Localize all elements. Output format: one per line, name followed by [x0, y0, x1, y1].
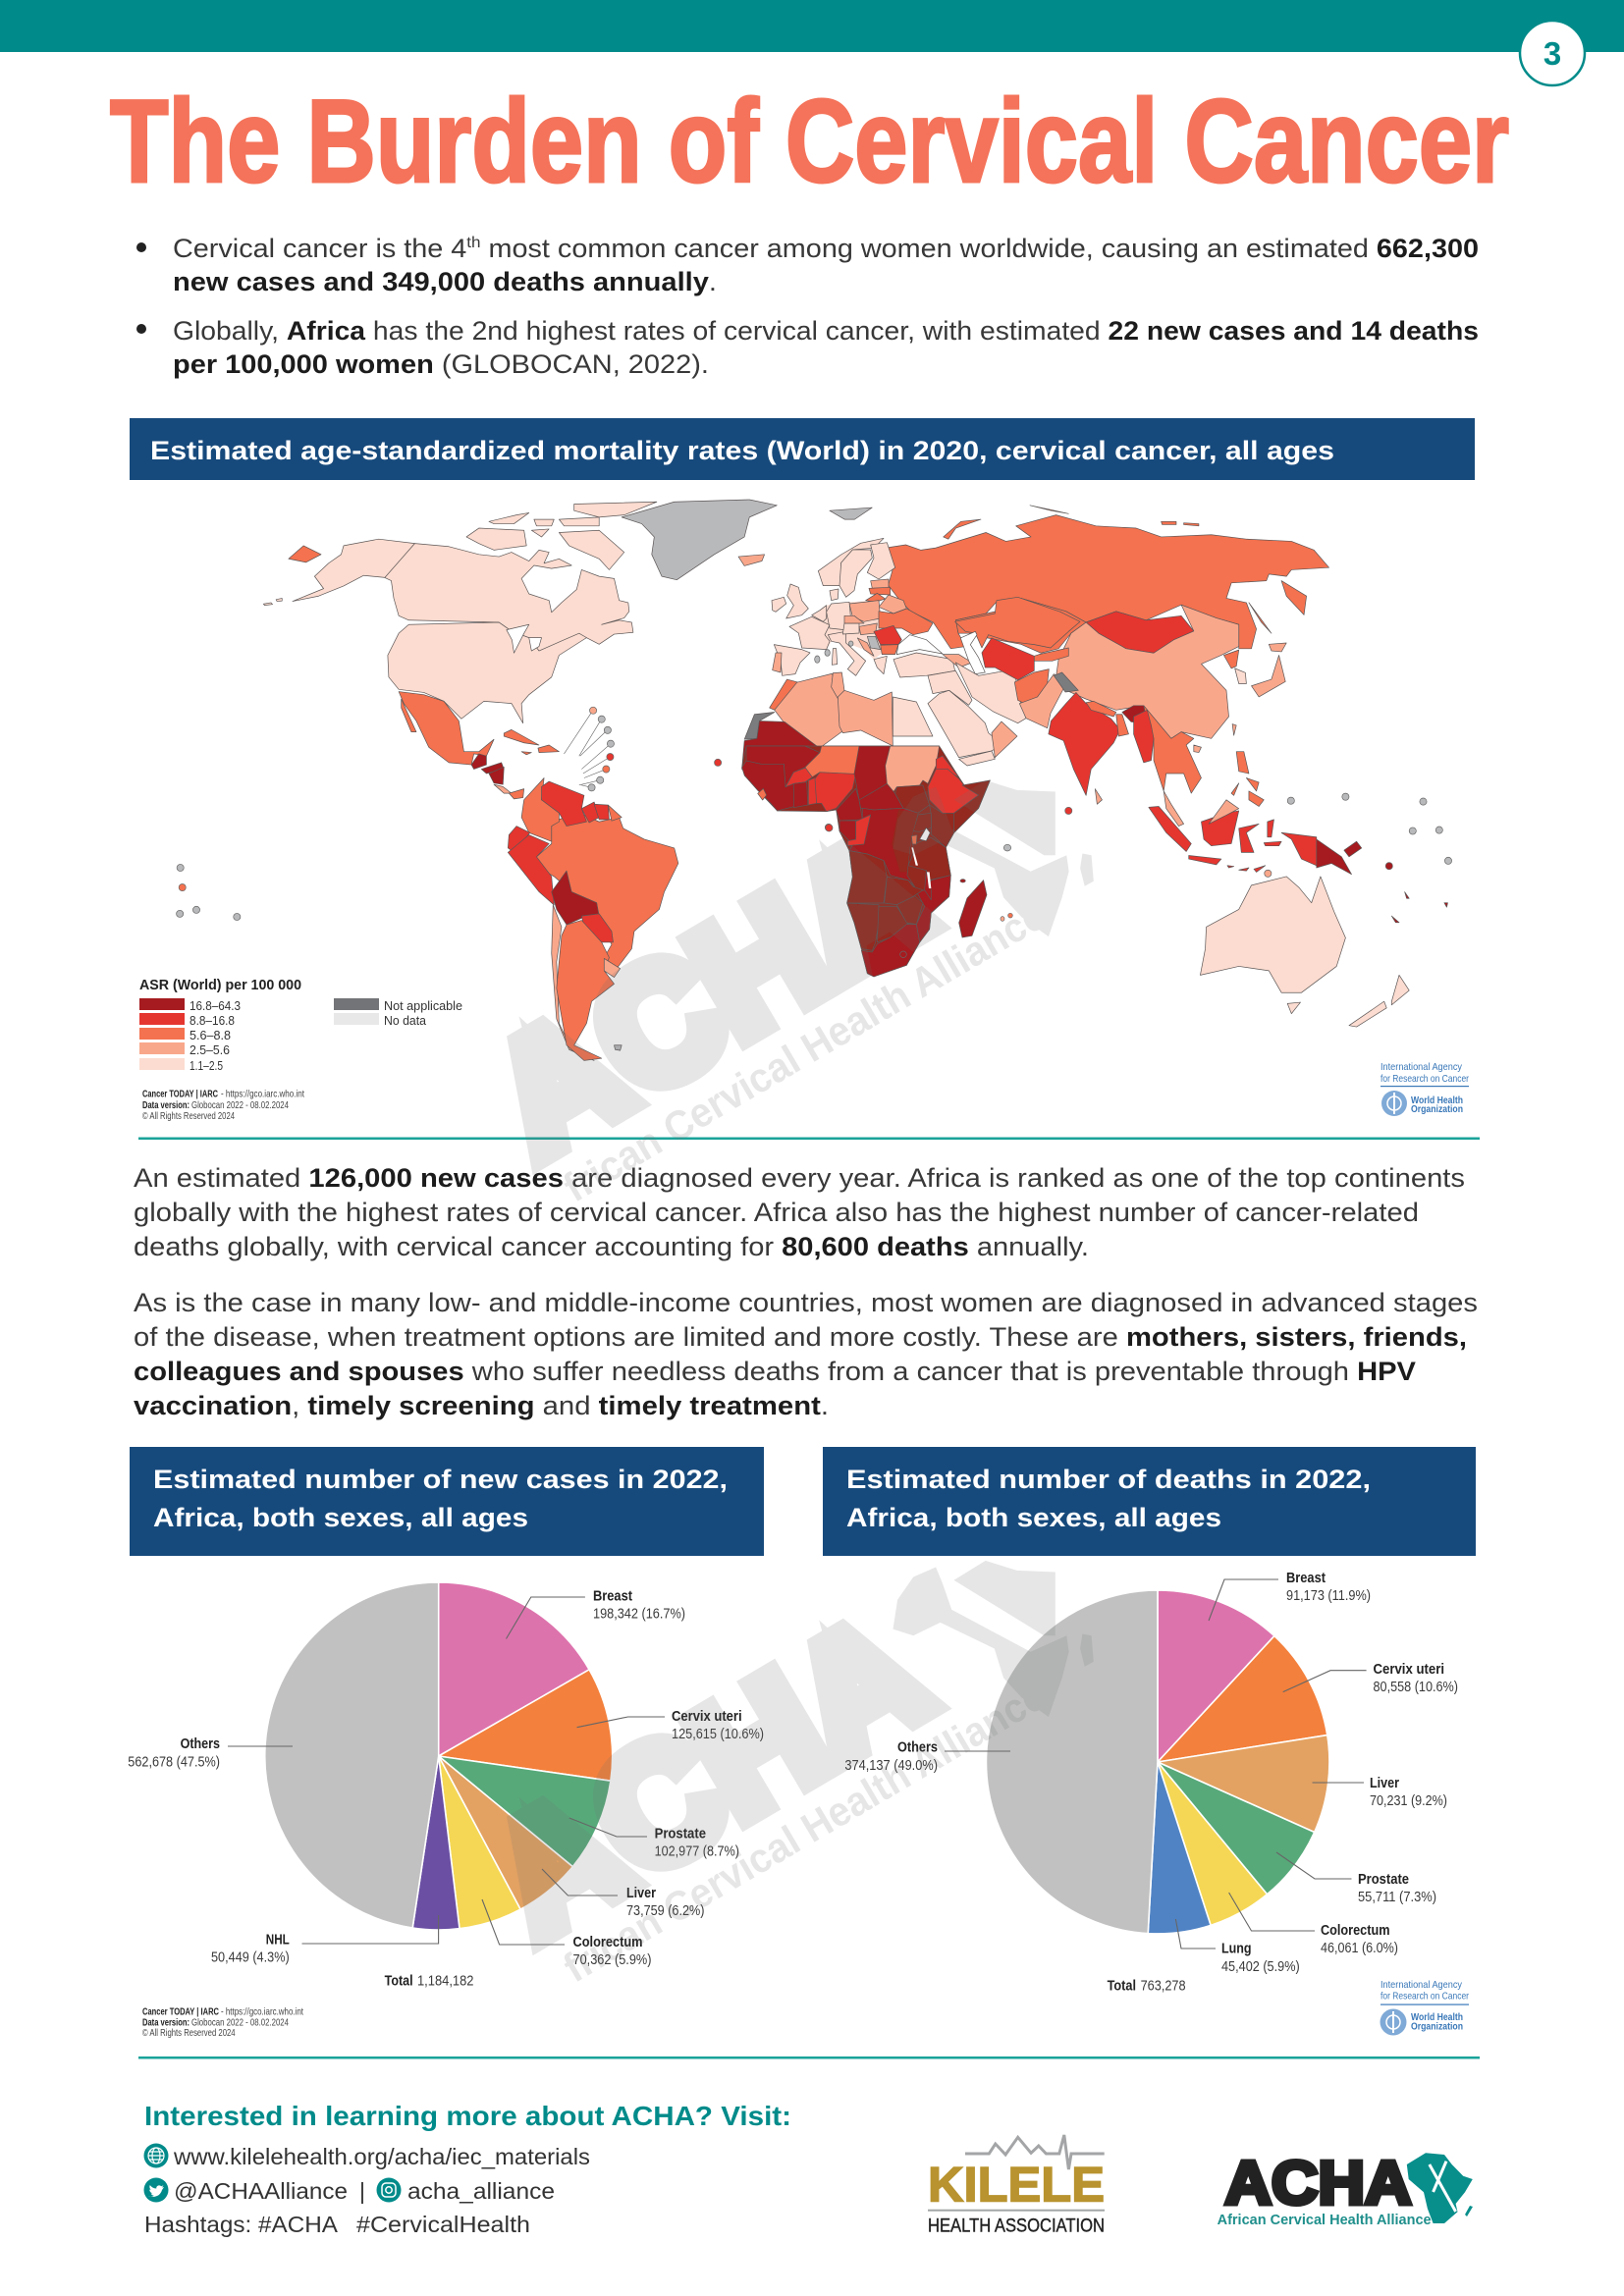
- pie chart: new cases: 102,977 (8.7%): [655, 1843, 739, 1859]
- heading: new cases: Africa, both sexes, all ages: [153, 1503, 528, 1532]
- paragraph: Africa burden: An estimated 126,000 new cases are diagnosed every year. Africa is ranked as one of the top continents: [134, 1163, 1465, 1193]
- paragraph: late diagnosis: As is the case in many low- and middle-income countries, most women are diagnosed in advanced stages: [134, 1288, 1478, 1317]
- logo: Kilele Health Association: KILELE: [928, 2158, 1105, 2213]
- paragraph: late diagnosis: of the disease, when treatment options are limited and more costly. These are mothers, sisters, friends,: [134, 1322, 1467, 1352]
- pie chart: new cases: 1,184,182: [417, 1974, 473, 1990]
- pie chart: new cases: 50,449 (4.3%): [211, 1949, 290, 1965]
- map legend: [139, 977, 462, 1073]
- paragraph: Africa burden: deaths globally, with cervical cancer accounting for 80,600 deaths annually.: [134, 1232, 1089, 1261]
- pie source citation: © All Rights Reserved 2024: [142, 2027, 236, 2039]
- watermark: ACHA over map: [462, 750, 1094, 1216]
- pie chart: deaths: Prostate: [1358, 1872, 1409, 1888]
- pie chart: new cases: 70,362 (5.9%): [573, 1952, 652, 1968]
- footer: social links: acha_alliance: [407, 2178, 555, 2204]
- pie chart: deaths: 55,711 (7.3%): [1358, 1890, 1436, 1905]
- pie source citation: - https://gco.iarc.who.int: [221, 2006, 303, 2018]
- pie chart: deaths: Liver: [1370, 1776, 1399, 1791]
- footer: hashtags: Hashtags: #ACHA: [144, 2212, 339, 2237]
- pie chart: deaths: 763,278: [1141, 1979, 1186, 1995]
- pie chart: deaths: 374,137 (49.0%): [844, 1758, 938, 1774]
- pie chart: deaths: 45,402 (5.9%): [1221, 1959, 1300, 1975]
- bullet list: global statistics: [136, 234, 1479, 379]
- heading: deaths: Africa, both sexes, all ages: [846, 1503, 1221, 1532]
- map legend: 2.5–5.6: [189, 1043, 230, 1057]
- map legend: 5.6–8.8: [189, 1029, 231, 1042]
- pie chart: deaths: [844, 1571, 1458, 1995]
- paragraph: late diagnosis: [134, 1288, 1478, 1420]
- pie chart: new cases: Colorectum: [573, 1935, 642, 1950]
- heading: deaths: Estimated number of deaths in 2022,: [846, 1465, 1371, 1494]
- pie chart: new cases: Others: [181, 1736, 220, 1752]
- bullet list: global statistics: Cervical cancer is the 4: [173, 234, 449, 263]
- footer: social links: @ACHAAlliance: [174, 2178, 348, 2204]
- pie chart: new cases: 198,342 (16.7%): [593, 1607, 685, 1623]
- pie chart: deaths: Total: [1108, 1979, 1136, 1995]
- pie chart: new cases: 73,759 (6.2%): [626, 1903, 705, 1919]
- IARC WHO logo, pie section: for Research on Cancer: [1380, 1991, 1469, 2002]
- divider above footer: [138, 2056, 1480, 2059]
- map source citation: [142, 1088, 304, 1122]
- IARC WHO logo, pie section: International Agency: [1380, 1979, 1463, 1991]
- top banner: [0, 0, 1624, 52]
- IARC WHO logo: International Agency: [1380, 1061, 1463, 1073]
- logo: Kilele Health Association: HEALTH ASSOCIATION: [928, 2215, 1105, 2236]
- map: Africa: [742, 746, 1012, 977]
- page number badge: [1520, 21, 1585, 85]
- paragraph: Africa burden: [134, 1163, 1465, 1261]
- footer: call to action: Interested in learning more about ACHA? Visit:: [144, 2101, 791, 2131]
- IARC WHO logo, pie section: World Health: [1411, 2011, 1463, 2023]
- map: Europe, North Africa and Middle East: [772, 538, 1080, 766]
- pie chart: deaths: 80,558 (10.6%): [1373, 1680, 1458, 1695]
- IARC WHO logo: Organization: [1411, 1103, 1463, 1115]
- heading: new cases: [130, 1447, 764, 1556]
- divider under map: [138, 1137, 1480, 1140]
- pie chart: deaths: Colorectum: [1321, 1923, 1390, 1939]
- page number badge: 3: [1543, 35, 1561, 72]
- IARC WHO logo, pie section: [1380, 1979, 1469, 2036]
- footer: website link with globe icon: www.kilelehealth.org/acha/iec_materials: [173, 2144, 590, 2169]
- heading: deaths: [823, 1447, 1476, 1556]
- map legend: ASR (World) per 100 000: [139, 977, 301, 993]
- footer: social links: |: [359, 2178, 365, 2204]
- logo: ACHA: ACHA: [1225, 2150, 1412, 2217]
- map heading: Estimated age-standardized mortality rates (World) in 2020, cervical cancer, all ages: [150, 436, 1334, 465]
- watermark: ACHA over pies: frican Cervical Health Alliance: [556, 1673, 1053, 1991]
- pie source citation: Globocan 2022 - 08.02.2024: [191, 2016, 289, 2028]
- footer: social links: [143, 2177, 555, 2204]
- paragraph: late diagnosis: colleagues and spouses who suffer needless deaths from a cancer that is preventable through HPV: [134, 1357, 1416, 1386]
- map source citation: - https://gco.iarc.who.int: [221, 1088, 304, 1099]
- heading: new cases: Estimated number of new cases in 2022,: [153, 1465, 728, 1494]
- pie chart: new cases: 125,615 (10.6%): [672, 1727, 764, 1742]
- logo: ACHA: [1218, 2150, 1473, 2228]
- bullet list: global statistics: Globally, Africa has the 2nd highest rates of cervical cancer, with estimated 22 new cases and 14 deaths: [173, 316, 1479, 346]
- logo: ACHA: African Cervical Health Alliance: [1218, 2213, 1432, 2228]
- map source citation: Globocan 2022 - 08.02.2024: [191, 1099, 289, 1111]
- bullet list: global statistics: 662,300: [1377, 234, 1479, 263]
- pie chart: new cases: Total: [385, 1974, 413, 1990]
- pie chart: deaths: 46,061 (6.0%): [1321, 1941, 1398, 1956]
- pie chart: new cases: [128, 1582, 764, 1990]
- IARC WHO logo: [1380, 1061, 1469, 1116]
- watermark: ACHA over pies: [462, 1530, 1094, 1997]
- footer: hashtags: #CervicalHealth: [356, 2212, 530, 2237]
- map legend: 1.1–2.5: [189, 1059, 223, 1073]
- map: Eurasia and Oceania: [886, 506, 1452, 1027]
- logo: Kilele Health Association: [928, 2135, 1105, 2236]
- world choropleth map: [177, 500, 1452, 1060]
- IARC WHO logo, pie section: Organization: [1411, 2020, 1463, 2032]
- pie chart: deaths: Cervix uteri: [1373, 1662, 1444, 1678]
- map legend: Not applicable: [384, 999, 462, 1013]
- pie chart: new cases: 562,678 (47.5%): [128, 1755, 220, 1771]
- pie source citation: Data version:: [142, 2016, 189, 2028]
- pie chart: deaths: Others: [897, 1740, 938, 1756]
- pie chart: new cases: Liver: [626, 1886, 656, 1901]
- paragraph: Africa burden: globally with the highest rates of cervical cancer. Africa also has the highest number of cancer-related: [134, 1198, 1419, 1227]
- bullet list: global statistics: th: [466, 235, 481, 251]
- pie chart: deaths: Lung: [1221, 1942, 1251, 1957]
- pie source citation: [142, 2006, 303, 2039]
- map: Americas and West Africa: [177, 500, 872, 1060]
- pie chart: deaths: 91,173 (11.9%): [1286, 1588, 1371, 1604]
- pie chart: deaths: Breast: [1286, 1571, 1326, 1586]
- watermark: ACHA over map: frican Cervical Health Alliance: [556, 892, 1053, 1210]
- paragraph: late diagnosis: vaccination , timely screening and timely treatment .: [134, 1391, 829, 1420]
- map source citation: Data version:: [142, 1099, 189, 1111]
- watermark: ACHA over pies: ACHA: [462, 1578, 954, 1970]
- map source citation: © All Rights Reserved 2024: [142, 1110, 235, 1122]
- IARC WHO logo: World Health: [1411, 1095, 1463, 1106]
- map legend: 8.8–16.8: [189, 1014, 235, 1028]
- pie chart: deaths: 70,231 (9.2%): [1370, 1793, 1447, 1809]
- bullet list: global statistics: most common cancer among women worldwide, causing an estimated: [481, 234, 1377, 263]
- bullet list: global statistics: new cases and 349,000 deaths annually .: [173, 267, 717, 296]
- bullet list: global statistics: per 100,000 women (GLOBOCAN, 2022).: [173, 349, 709, 379]
- pie source citation: Cancer TODAY | IARC: [142, 2006, 219, 2018]
- pie chart: new cases: Prostate: [655, 1826, 706, 1842]
- map source citation: Cancer TODAY | IARC: [142, 1088, 218, 1099]
- map legend: 16.8–64.3: [189, 999, 241, 1013]
- pie chart: new cases: NHL: [266, 1933, 290, 1949]
- IARC WHO logo: for Research on Cancer: [1380, 1073, 1469, 1085]
- footer: hashtags: [144, 2212, 530, 2237]
- map legend: No data: [384, 1014, 426, 1028]
- map heading: [130, 418, 1475, 480]
- watermark: ACHA over map: ACHA: [462, 798, 954, 1190]
- pie chart: new cases: Breast: [593, 1588, 632, 1604]
- pie chart: new cases: Cervix uteri: [672, 1709, 742, 1725]
